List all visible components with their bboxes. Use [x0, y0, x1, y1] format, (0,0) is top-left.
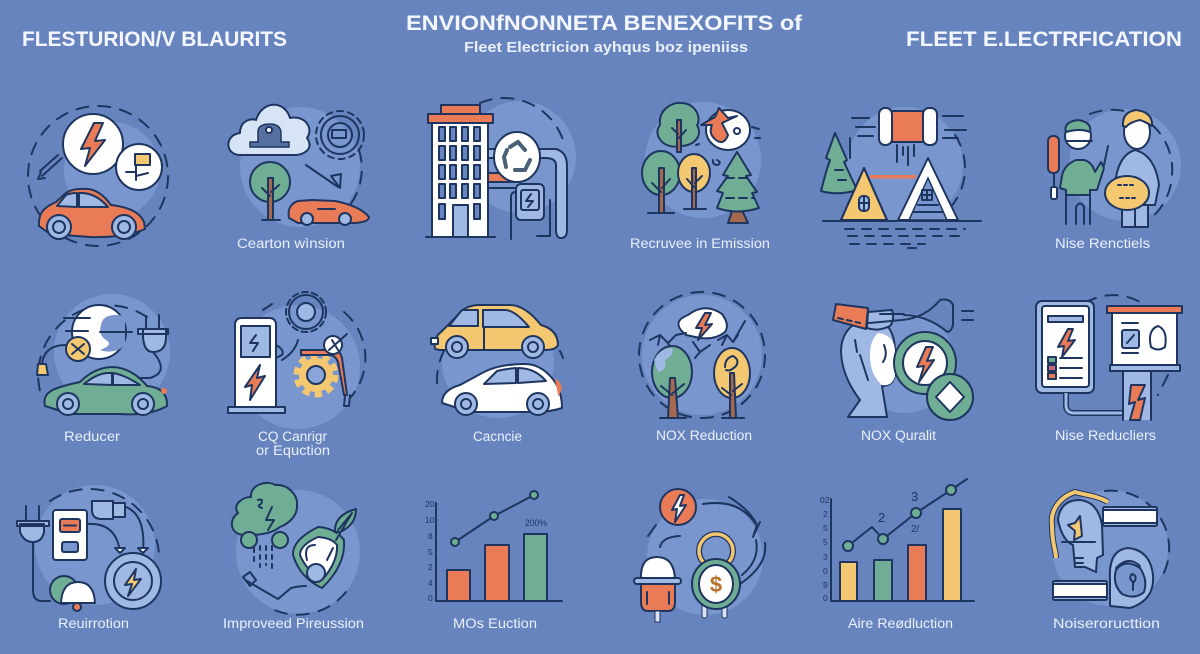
icon: horn: [869, 300, 973, 332]
axis labels: 0: [428, 593, 433, 603]
arrows: [87, 507, 148, 553]
icon: cylinder: [852, 108, 966, 165]
icon: pine: [821, 133, 857, 193]
axis labels: 0: [823, 593, 828, 603]
label: Cacncie: [473, 429, 522, 444]
axis labels: 9: [823, 580, 828, 590]
axis labels: 10: [425, 515, 435, 525]
icon: station: [228, 318, 298, 413]
axis labels: 2: [428, 562, 433, 572]
axis labels: 5: [823, 523, 828, 533]
icon: tablet: [1036, 301, 1094, 393]
icon: white panel: [53, 510, 87, 560]
panel: tablet and board: [1036, 295, 1182, 420]
panel: charging station: [228, 292, 365, 429]
icon: big cabin: [898, 158, 958, 220]
panel: building: [426, 98, 576, 239]
icon: small cabin: [841, 168, 887, 220]
icon: yellow tree: [714, 348, 750, 418]
bar chart: MOs: [425, 491, 562, 603]
icon: small plug: [37, 345, 66, 375]
icon: person left: [1060, 120, 1108, 224]
panel: carbon emission: [228, 105, 369, 227]
panel: electric car: [28, 106, 168, 246]
icon: bar: [870, 175, 916, 178]
icon: lock: $: [710, 572, 722, 597]
label: Cearton wìnsion: [237, 236, 345, 251]
icon: books bottom: [1053, 581, 1107, 600]
arcs: [648, 497, 765, 584]
panel: heads and books: [1052, 490, 1169, 608]
icon: wall plug: [17, 506, 50, 601]
icon: upper plug: [92, 501, 125, 519]
icon: nozzle: [324, 334, 347, 354]
icon: white car: [442, 364, 562, 415]
panel: tree and shield: [232, 483, 360, 615]
axis labels: [425, 499, 435, 603]
icon: yellow tree: [678, 154, 710, 209]
line with markers: [843, 479, 967, 551]
icon: gear: [286, 292, 326, 332]
icon: head: [841, 320, 895, 417]
icon: pipe: [488, 149, 567, 238]
icon: orange band: [833, 304, 893, 330]
icon: bolt cloud: [678, 308, 727, 340]
icon: red pipe: [301, 350, 350, 406]
icon: tree: [250, 162, 290, 220]
icon: books top: [1103, 507, 1157, 526]
icon: plug: [634, 557, 681, 622]
icon: bolt ring: [894, 332, 956, 394]
axes: [436, 503, 562, 601]
icon: post: [1123, 371, 1151, 420]
label: Reducer: [64, 429, 121, 444]
axis labels: 5: [428, 547, 433, 557]
data label: 200%: [525, 518, 547, 529]
label: MOs Euction: [453, 616, 537, 631]
label: or Equction: [256, 443, 330, 458]
icon: fire bubble: [701, 108, 760, 150]
label: Noiseroructtion: [1053, 616, 1160, 631]
icon: device: [1048, 136, 1059, 199]
icon: tree top: [657, 103, 699, 152]
heading: left: FLESTURION/V BLAURITS: [22, 28, 287, 51]
icon: leaf: [335, 509, 356, 540]
icon: green tree: [642, 151, 680, 213]
axis labels: [820, 495, 830, 603]
label: Nise Reducliers: [1055, 428, 1156, 443]
panel: people: [1048, 109, 1181, 227]
bar chart: air reduction: [820, 479, 974, 603]
panel: plug and lock: [634, 489, 765, 622]
panel: NOX trees: [639, 292, 765, 418]
icon: diamond ring: [927, 374, 973, 420]
icon: gear: [316, 111, 364, 159]
icon: cable: [1066, 393, 1125, 413]
panel: head with horn: [833, 300, 973, 420]
line with markers: [451, 491, 538, 546]
label: Improveed Pireussion: [223, 616, 364, 631]
icon: bolt badge: [660, 489, 696, 525]
axis labels: 8: [428, 531, 433, 541]
axis labels: 5: [823, 537, 828, 547]
icon: moon: [64, 305, 132, 359]
icon: yellow gear: [297, 356, 335, 394]
data labels: 2: [878, 510, 885, 525]
icon: green tree: [652, 346, 692, 418]
axes: [831, 499, 974, 601]
icon: second head: [1110, 548, 1153, 608]
icon: sports car: [289, 200, 369, 225]
axis labels: 02: [820, 495, 830, 505]
icon: cloud: [228, 105, 310, 155]
label: CQ Canrigr: [258, 429, 328, 444]
axis labels: 20: [425, 499, 435, 509]
label: Aire Reødluction: [848, 616, 953, 631]
label: Recruvee in Emission: [630, 236, 770, 251]
icon: plug: [138, 315, 168, 378]
icon: orange car: [39, 189, 145, 239]
label: Reuirrotion: [58, 616, 129, 631]
arrow: [38, 155, 62, 179]
icon: board: [1107, 306, 1182, 371]
icon: hose: [243, 572, 306, 599]
subtitle: Fleet Electricion ayhqus boz ipeniiss: [464, 39, 748, 56]
heading: right: FLEET E.LECTRFICATION: [906, 28, 1182, 51]
icon: person right: [1105, 110, 1159, 227]
icon: pine: [717, 152, 759, 223]
panel: plug and ring: [17, 485, 161, 611]
icon: green car: [44, 367, 167, 415]
icon: head with hair: [1052, 492, 1108, 572]
data labels: [878, 489, 920, 535]
icon: charger: [511, 184, 550, 239]
icon: yellow car: [431, 305, 558, 358]
icon: circuit bubble: [116, 144, 162, 190]
label: NOX Quralit: [861, 428, 936, 443]
panel: reducer green car: [37, 294, 170, 415]
axis labels: 3: [823, 552, 828, 562]
icon: recycle bubble: [494, 132, 540, 182]
icon: tower: [426, 105, 495, 237]
panel: two cars: [431, 305, 563, 418]
icon: yellow disc: [66, 337, 90, 361]
data labels: 3: [911, 489, 918, 504]
icon: orange bar: [488, 173, 520, 182]
icon: bolt ring: [105, 553, 161, 609]
data labels: 2/: [911, 524, 920, 535]
icon: bell: [50, 576, 95, 611]
icon: bolt bubble: [63, 114, 123, 174]
bars: [447, 534, 547, 601]
axis labels: 4: [428, 578, 433, 588]
ground and water: [823, 220, 981, 222]
panel: trees: [642, 102, 761, 223]
smoke: [696, 144, 720, 165]
arrow: [306, 165, 341, 188]
title: ENVIONfNONNETA BENEXOFITS of: [406, 12, 803, 35]
axis labels: 2: [823, 509, 828, 519]
branches: [650, 321, 745, 358]
axis labels: 0: [823, 566, 828, 576]
bars: [840, 509, 961, 601]
panel: cabins: [821, 107, 981, 248]
icon: shield: [293, 527, 344, 588]
label: NOX Reduction: [656, 428, 752, 443]
label: Nise Renctiels: [1055, 236, 1150, 251]
icon: green tree: [232, 483, 297, 568]
